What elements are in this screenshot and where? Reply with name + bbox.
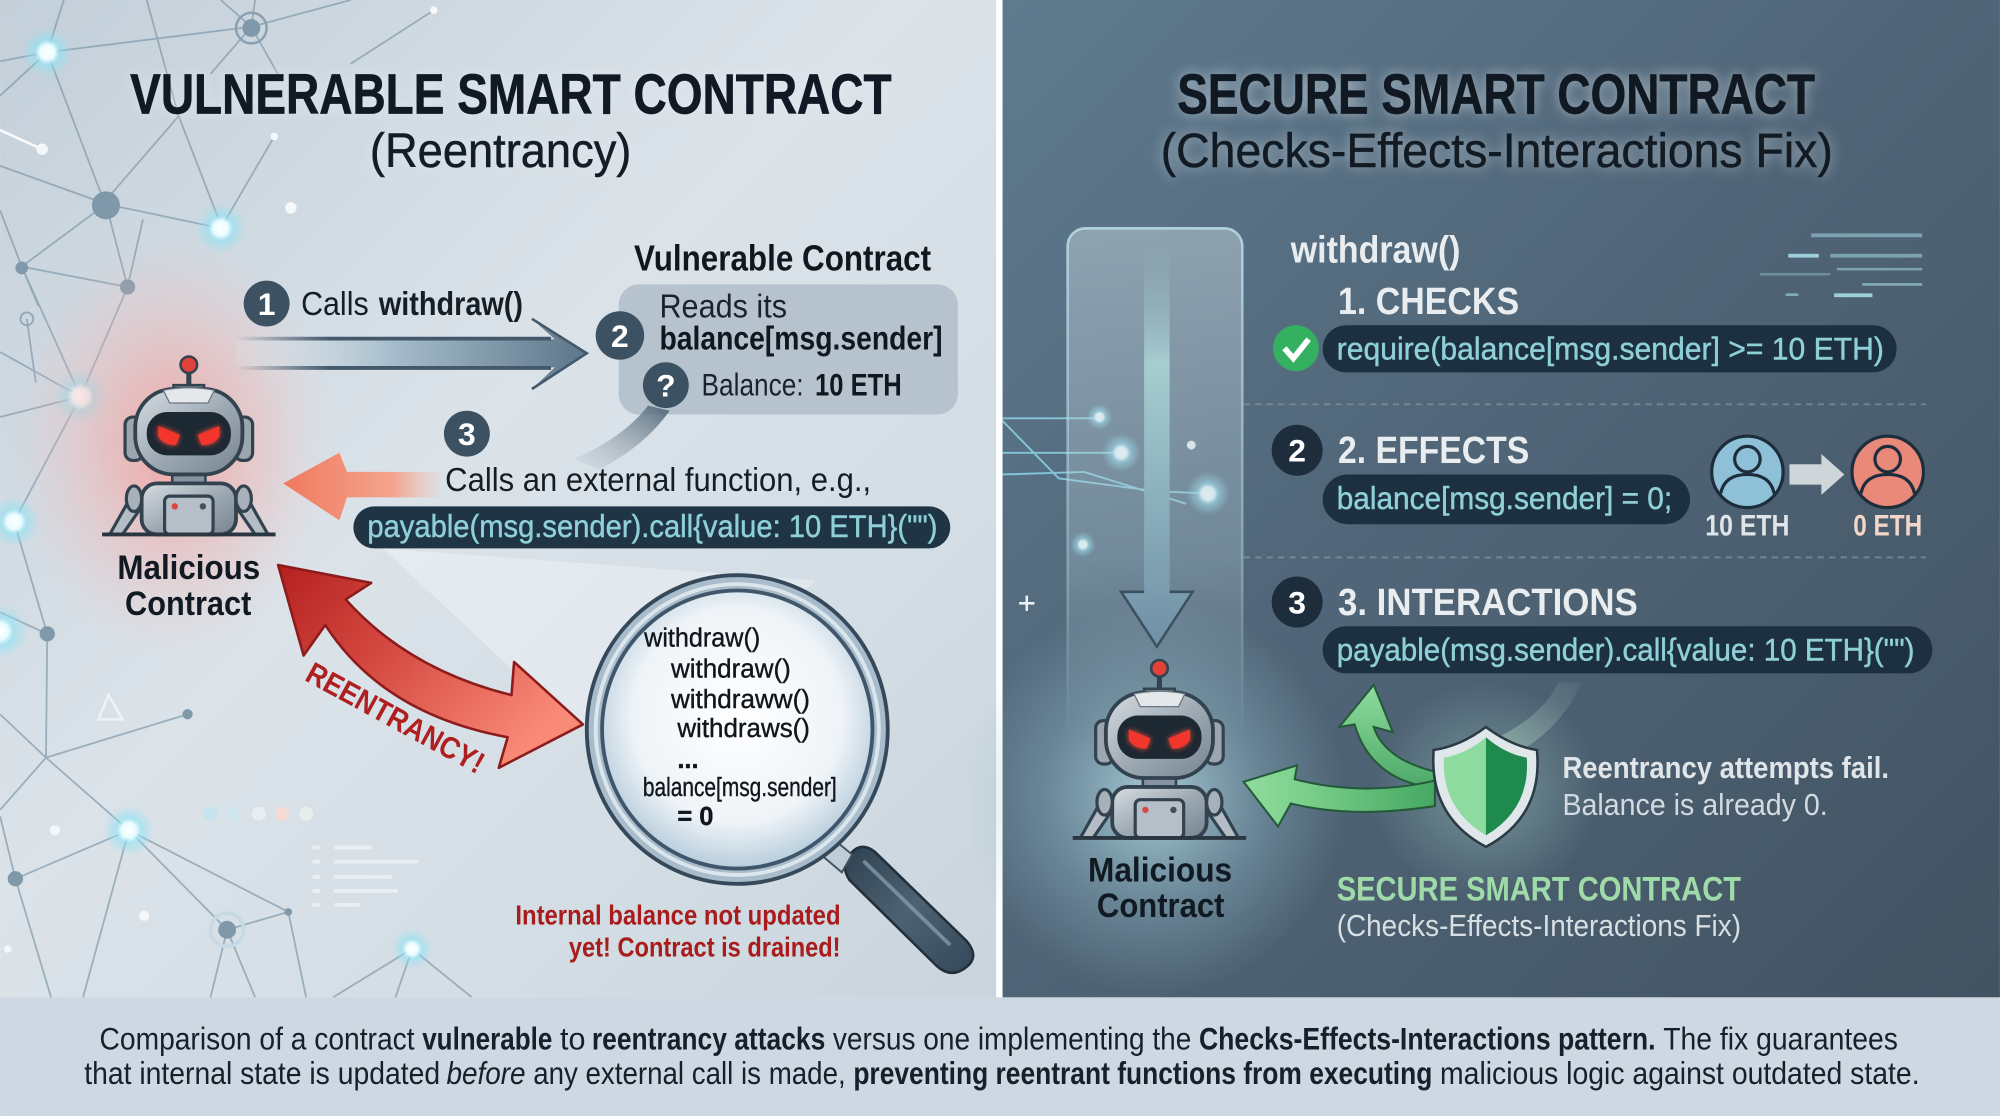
icon: magnifying glass: withdraws() (676, 715, 810, 743)
callout: drained warning: Internal balance not updated (515, 900, 841, 931)
footer caption: that internal state is updated (84, 1055, 440, 1091)
footer caption: before (446, 1055, 526, 1091)
callout: balance read: Balance: (702, 366, 804, 402)
icon: magnifying glass: balance[msg.sender] (643, 774, 837, 802)
heading: vulnerable contract: Vulnerable Contract (634, 238, 931, 278)
label: malicious contract right: Contract (1097, 887, 1225, 925)
step 3 label (444, 411, 871, 499)
panel: vulnerable contract (0, 0, 996, 997)
step: interactions: 3. INTERACTIONS (1338, 581, 1638, 624)
icon: malicious robot right (1073, 660, 1246, 838)
icon: magnifying glass: = 0 (677, 803, 713, 831)
panel: secure contract (963, 0, 2000, 997)
title: secure smart contract: (Checks-Effects-Interactions Fix) (1161, 124, 1833, 178)
step: interactions: 3 (1288, 584, 1306, 620)
footer caption: reentrancy attacks (592, 1021, 825, 1057)
text: reentrancy fails: Balance is already 0. (1562, 788, 1828, 822)
label: malicious contract left: Malicious (117, 549, 260, 587)
callout: drained warning (515, 900, 841, 963)
title: vulnerable smart contract: (Reentrancy) (370, 124, 631, 178)
arrow: step 3 external call (283, 453, 440, 520)
arrow: step 1 call (236, 319, 587, 389)
step 3 label: Calls an external function, e.g., (445, 462, 871, 499)
callout: balance read: 10 ETH (815, 366, 902, 402)
icon: magnifying glass: ... (677, 746, 699, 774)
step 3 label: 3 (458, 416, 476, 452)
footer caption: any external call is made, (533, 1055, 846, 1091)
footer caption: to (560, 1021, 585, 1057)
footer caption: versus one implementing the (833, 1021, 1191, 1057)
step: interactions (1272, 576, 1932, 673)
footer caption (0, 997, 2000, 1116)
step: effects: balance[msg.sender] = 0; (1337, 480, 1672, 516)
text: reentrancy fails (1562, 751, 1889, 822)
label: malicious contract left: Contract (125, 585, 252, 623)
footer caption: vulnerable (422, 1021, 552, 1057)
callout: balance read (574, 284, 958, 469)
icon: magnifying glass: withdraw() (643, 625, 760, 653)
callout: balance read: ? (656, 368, 676, 404)
icon: balance change avatars (1705, 436, 1923, 543)
step 1 label: withdraw() (378, 286, 523, 323)
title: vulnerable smart contract: VULNERABLE SMART CONTRACT (130, 63, 892, 126)
step 1 label (244, 281, 523, 327)
callout: balance read: Reads its (659, 289, 787, 326)
label: malicious contract right (1088, 851, 1232, 925)
arrow: blocked attempts (1244, 682, 1582, 826)
icon: shield (1433, 727, 1538, 847)
label: malicious contract left (117, 549, 260, 623)
text: secure summary (1337, 870, 1741, 943)
footer caption: The fix guarantees (1663, 1021, 1898, 1057)
icon: balance change avatars: 10 ETH (1705, 510, 1789, 543)
icon: malicious robot left (102, 356, 276, 534)
footer caption: preventing reentrant functions from executing (853, 1055, 1432, 1091)
title: secure smart contract: SECURE SMART CONTRACT (1177, 63, 1815, 126)
code: external call: payable(msg.sender).call{value: 10 ETH}("") (367, 508, 938, 544)
step 1 label: 1 (258, 286, 275, 322)
icon: balance change avatars: 0 ETH (1853, 510, 1922, 543)
callout: drained warning: yet! Contract is drained! (569, 932, 841, 963)
text: reentrancy fails: Reentrancy attempts fail. (1562, 751, 1889, 785)
label: reentrancy: REENTRANCY! (300, 656, 490, 781)
callout: balance read: 2 (611, 318, 629, 354)
text: secure summary: (Checks-Effects-Interactions Fix) (1337, 909, 1741, 943)
heading: withdraw: withdraw() (1290, 229, 1460, 272)
title: secure smart contract (1161, 63, 1833, 178)
callout: balance read: balance[msg.sender] (659, 320, 943, 357)
step: checks (1273, 280, 1897, 372)
step: effects: 2. EFFECTS (1338, 429, 1529, 472)
icon: magnifying glass: withdraww() (670, 686, 810, 714)
icon: magnifying glass (587, 575, 973, 973)
icon: magnifying glass: withdraw() (670, 655, 791, 683)
step: effects: 2 (1288, 433, 1306, 469)
footer caption: Comparison of a contract (100, 1021, 415, 1057)
footer caption: malicious logic against outdated state. (1440, 1055, 1920, 1091)
step: effects (1272, 425, 1690, 524)
text: secure summary: SECURE SMART CONTRACT (1337, 870, 1741, 908)
arrow: reentrancy loop (278, 565, 583, 768)
step: checks: require(balance[msg.sender] >= 10 ETH) (1337, 331, 1884, 367)
title: vulnerable smart contract (130, 63, 892, 178)
step 1 label: Calls (301, 286, 369, 323)
label: malicious contract right: Malicious (1088, 851, 1232, 889)
step: checks: 1. CHECKS (1338, 280, 1519, 323)
footer caption: Checks-Effects-Interactions pattern. (1199, 1021, 1656, 1057)
step: interactions: payable(msg.sender).call{value: 10 ETH}("") (1337, 632, 1914, 668)
column: protected call path (1068, 228, 1242, 738)
